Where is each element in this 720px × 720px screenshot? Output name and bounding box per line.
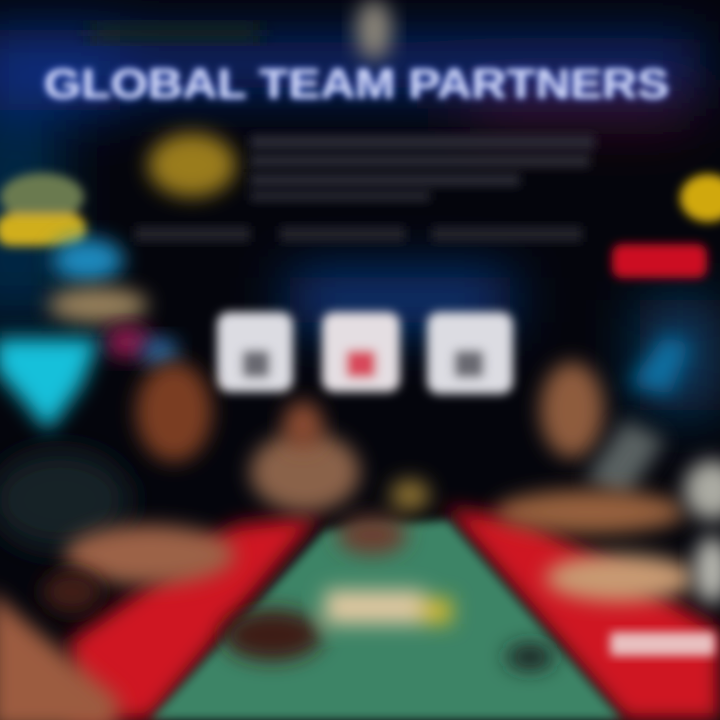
blue mark (628, 335, 690, 395)
yellow icon (0, 173, 86, 246)
forearm right (495, 490, 685, 534)
red bar (612, 244, 707, 278)
card 2 (322, 312, 400, 392)
lower forearm right (545, 554, 695, 602)
description text (250, 135, 595, 201)
lower white sleeve (694, 536, 720, 604)
logo emblem top (356, 0, 392, 60)
three white cards (217, 312, 513, 394)
beige icon (48, 287, 148, 323)
forearm dark shadow (42, 570, 102, 614)
logo mark (90, 26, 260, 40)
lower left arm (0, 590, 120, 720)
centre figure head (283, 401, 323, 449)
right colourful shapes (612, 174, 720, 395)
cyan shield (0, 338, 100, 432)
white sleeve (684, 460, 720, 520)
title text: GLOBAL TEAM PARTNERS (44, 60, 669, 107)
title (44, 0, 669, 107)
column headings (135, 226, 582, 242)
basketball (136, 362, 212, 462)
card 3 (427, 312, 513, 394)
players hands left (0, 362, 360, 720)
table highlights (222, 479, 554, 670)
white label on right mat (610, 632, 715, 656)
centre figure (250, 432, 360, 512)
floor: red mats (70, 508, 720, 720)
gold badge (148, 133, 236, 197)
players hands right (495, 362, 720, 604)
description panel (135, 133, 595, 242)
light blue icon (52, 238, 124, 282)
forearm left (65, 525, 235, 585)
floor: green table (150, 520, 622, 720)
yellow icon right (680, 174, 720, 222)
background glow (0, 30, 720, 410)
title halo: GLOBAL TEAM PARTNERS (44, 60, 669, 107)
raised arm (540, 362, 604, 458)
card 1 (217, 312, 293, 392)
left colourful shapes (0, 173, 178, 432)
grey sleeve right (585, 420, 665, 500)
small blue icon (142, 338, 178, 366)
dark sleeve (0, 450, 130, 550)
magenta icon (104, 326, 152, 358)
